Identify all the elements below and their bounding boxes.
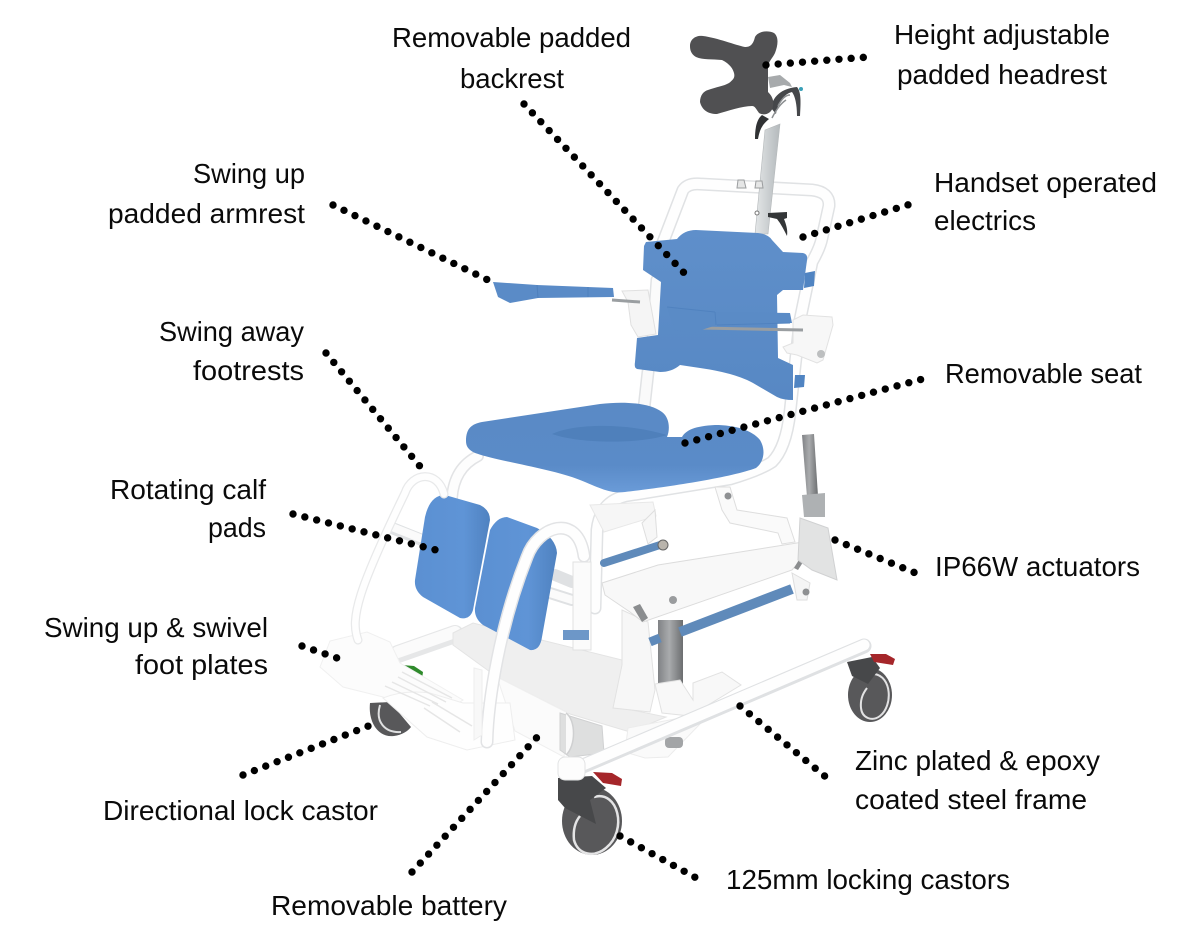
calf pad left — [415, 495, 490, 618]
label: headrest: Height adjustable — [894, 19, 1110, 50]
seat support link — [715, 487, 795, 544]
leader: actuators — [835, 540, 918, 574]
label: foot plates: foot plates — [135, 649, 268, 680]
handset lever — [755, 211, 787, 236]
rear rod end — [658, 540, 668, 550]
front blue rod — [680, 589, 792, 632]
frame corner cap — [558, 757, 585, 780]
footrest tube left — [355, 477, 444, 640]
leader: directional castor — [243, 725, 371, 775]
label: steel frame: Zinc plated & epoxy — [855, 745, 1100, 776]
base beam — [453, 623, 666, 732]
label: seat: Removable seat — [945, 358, 1142, 389]
label: armrest: padded armrest — [108, 198, 305, 229]
rear actuator — [792, 434, 837, 600]
front castor — [558, 772, 622, 855]
label: calf pads: pads — [208, 512, 266, 543]
label: steel frame: coated steel frame — [855, 784, 1087, 815]
lower frame tube — [583, 646, 864, 766]
leader: headrest — [766, 57, 868, 65]
label: battery: Removable battery — [271, 890, 507, 921]
lift column bracket — [613, 610, 655, 712]
leader: locking castors — [620, 836, 700, 880]
lift foot bracket — [655, 672, 741, 716]
label: backrest: backrest — [460, 63, 564, 94]
leader: steel frame — [740, 706, 827, 778]
headrest pole — [755, 124, 780, 234]
pole clamps — [737, 180, 763, 188]
label: backrest: Removable padded — [392, 22, 631, 53]
headrest bracket — [755, 75, 803, 139]
footrest clip — [563, 630, 589, 640]
cross tubes — [392, 528, 572, 600]
actuator cylinder — [658, 620, 683, 684]
main lift beam — [602, 542, 808, 622]
label: directional castor: Directional lock castor — [103, 795, 378, 826]
leader: footrests — [326, 353, 423, 470]
left footplate — [320, 632, 463, 717]
lower base tube — [398, 634, 455, 654]
short rod stub — [650, 638, 660, 642]
right bracket — [783, 315, 833, 363]
footrest clamp — [474, 668, 482, 740]
leader: battery — [412, 734, 540, 872]
label: calf pads: Rotating calf — [110, 474, 266, 505]
seat support plate — [590, 502, 656, 532]
battery — [497, 677, 604, 757]
rear castor right — [847, 654, 895, 722]
label: electrics: electrics — [934, 205, 1036, 236]
footrest tube right — [487, 528, 584, 742]
leader: foot plates — [302, 646, 337, 658]
leader: seat — [685, 377, 930, 443]
leader: electrics — [803, 203, 914, 237]
under-frame cover — [625, 718, 702, 758]
left armrest bracket — [622, 290, 656, 337]
back frame — [452, 184, 829, 608]
front link — [642, 510, 657, 544]
leader: calf pads — [293, 514, 440, 551]
armrest bars — [612, 300, 803, 330]
label: armrest: Swing up — [193, 158, 305, 189]
label: headrest: padded headrest — [897, 59, 1107, 90]
bolt under frame — [665, 737, 683, 748]
label: actuators: IP66W actuators — [935, 551, 1140, 582]
right footplate — [383, 672, 515, 750]
label: electrics: Handset operated — [934, 167, 1157, 198]
chair illustration — [320, 31, 895, 855]
left armrest — [493, 282, 614, 303]
leader: backrest — [524, 104, 688, 277]
cross tube highlight — [392, 527, 572, 600]
backrest pad — [635, 230, 815, 400]
label: foot plates: Swing up & swivel — [44, 612, 268, 643]
label: footrests: footrests — [193, 355, 304, 386]
seat pad — [466, 403, 763, 492]
rear blue rod — [604, 545, 660, 563]
label: locking castors: 125mm locking castors — [726, 864, 1010, 895]
label: footrests: Swing away — [159, 316, 304, 347]
right armrest — [667, 307, 792, 333]
rear castor left — [370, 702, 411, 736]
calf pad right — [475, 517, 557, 650]
headrest pad — [690, 31, 778, 114]
green directional lock pedal — [402, 665, 423, 679]
leader: armrest — [333, 205, 488, 280]
footrest post — [573, 562, 591, 650]
